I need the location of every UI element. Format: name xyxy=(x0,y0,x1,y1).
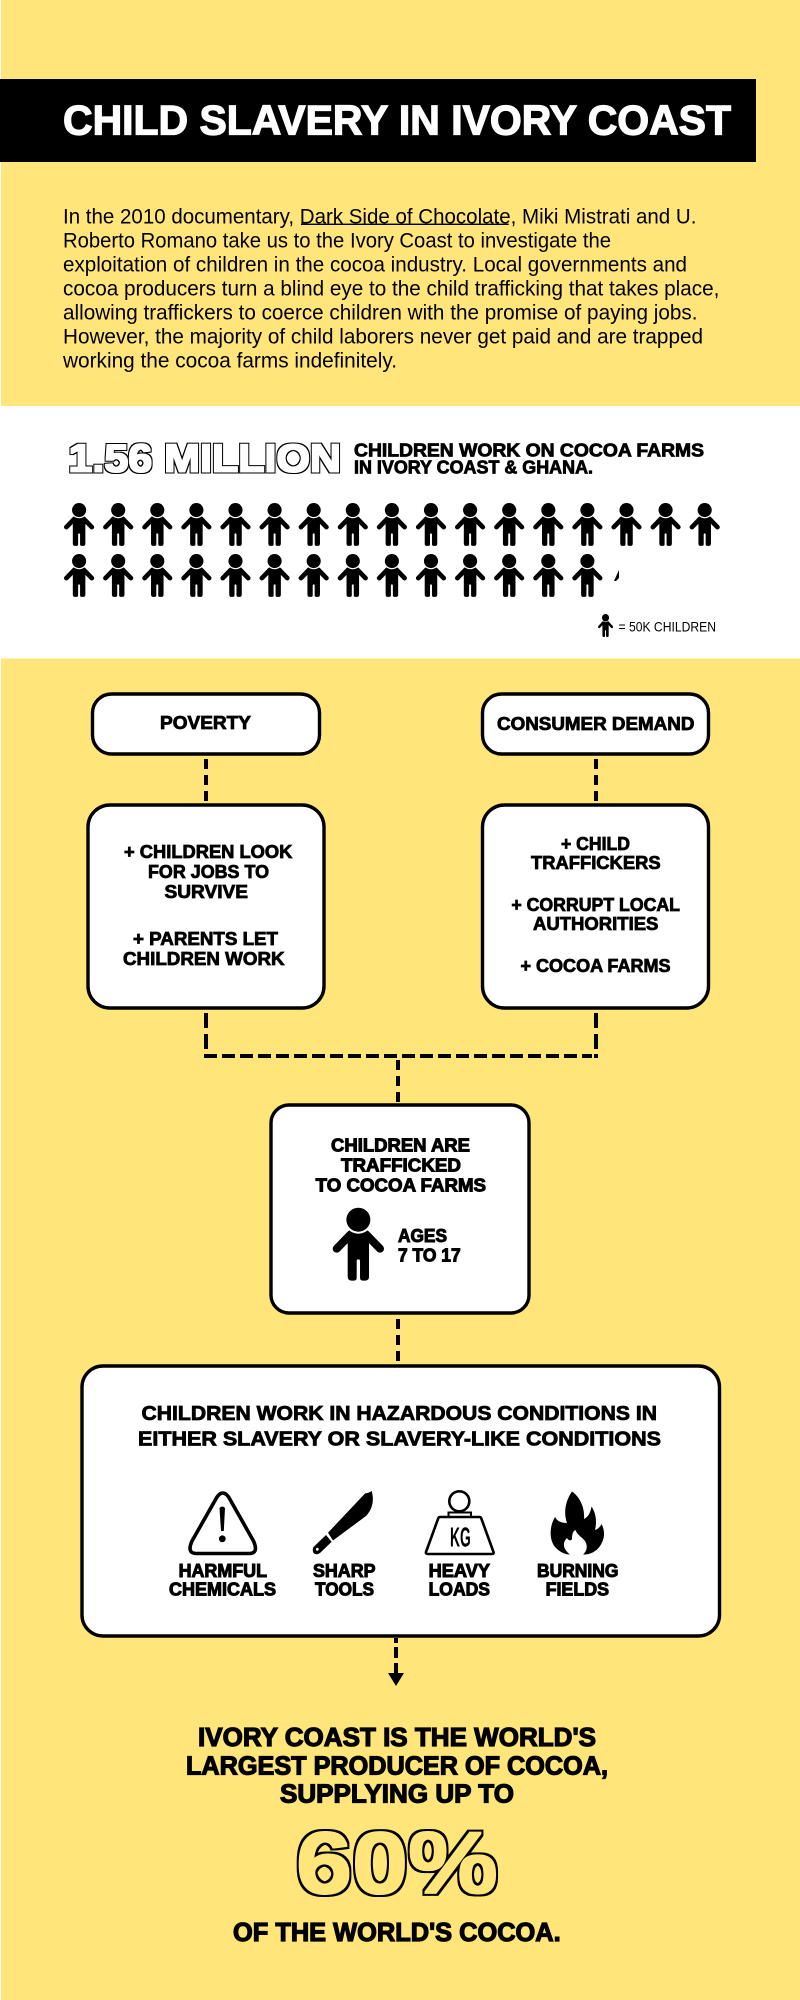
box: demand effects: + CORRUPT LOCAL xyxy=(511,894,680,915)
icon: warning triangle xyxy=(190,1493,255,1554)
intro paragraph: working the cocoa farms indefinitely. xyxy=(62,349,397,372)
label: sharp tools: SHARP xyxy=(313,1561,376,1581)
label: harmful chemicals: HARMFUL xyxy=(179,1561,267,1581)
box: consumer demand xyxy=(482,694,708,754)
hazards heading: EITHER SLAVERY OR SLAVERY-LIKE CONDITIONS xyxy=(138,1429,661,1451)
closing statement: OF THE WORLD'S COCOA. xyxy=(233,1919,561,1947)
conclusion statement xyxy=(186,1724,608,1808)
ages label: AGES xyxy=(398,1226,447,1246)
title banner: CHILD SLAVERY IN IVORY COAST xyxy=(63,96,731,144)
box: poverty effects: SURVIVE xyxy=(164,881,248,902)
pictogram: children row two xyxy=(66,553,619,597)
label: burning fields: FIELDS xyxy=(546,1579,609,1599)
panel: hazardous conditions xyxy=(82,1366,720,1636)
conclusion statement: IVORY COAST IS THE WORLD'S xyxy=(198,1724,596,1752)
connector: trafficked to hazards xyxy=(396,1319,400,1364)
intro paragraph: allowing traffickers to coerce children with the promise of paying jobs. xyxy=(63,301,698,324)
connector: causes to details xyxy=(206,759,596,803)
icon: kg weight xyxy=(426,1491,494,1554)
legend xyxy=(599,613,716,637)
intro paragraph: However, the majority of child laborers never get paid and are trapped xyxy=(63,325,703,348)
box: poverty effects: CHILDREN WORK xyxy=(123,948,285,969)
icon: flame xyxy=(551,1492,604,1555)
label: heavy loads: HEAVY xyxy=(429,1561,490,1581)
big percentage: 60% xyxy=(296,1815,498,1912)
intro paragraph: cocoa producers turn a blind eye to the child trafficking that takes place, xyxy=(63,277,719,300)
statistic caption xyxy=(354,440,704,478)
conclusion statement: SUPPLYING UP TO xyxy=(280,1780,514,1808)
box: poverty effects: + PARENTS LET xyxy=(133,928,279,949)
box: demand effects: + CHILD xyxy=(561,833,630,854)
hazards heading: CHILDREN WORK IN HAZARDOUS CONDITIONS IN xyxy=(142,1403,657,1425)
label: sharp tools: TOOLS xyxy=(315,1579,374,1599)
label: sharp tools xyxy=(313,1561,376,1599)
label: harmful chemicals xyxy=(169,1561,276,1599)
box: demand effects: AUTHORITIES xyxy=(533,913,658,934)
big number: 1.56 MILLION xyxy=(68,438,341,480)
box: children are trafficked: TO COCOA FARMS xyxy=(316,1176,486,1196)
box: demand effects xyxy=(482,805,708,1008)
icon: kg weight: KG xyxy=(450,1522,471,1552)
statistic caption: CHILDREN WORK ON COCOA FARMS xyxy=(354,440,704,460)
intro paragraph: In the 2010 documentary, Dark Side of Chocolate, Miki Mistrati and U. xyxy=(63,205,696,228)
label: heavy loads xyxy=(429,1561,490,1599)
panel: statistic xyxy=(0,406,800,658)
ages label xyxy=(398,1226,461,1266)
box: children are trafficked xyxy=(271,1105,529,1313)
box: consumer demand: CONSUMER DEMAND xyxy=(497,714,694,734)
box: demand effects: TRAFFICKERS xyxy=(531,852,661,873)
label: heavy loads: LOADS xyxy=(429,1579,490,1599)
box: demand effects: + COCOA FARMS xyxy=(520,955,670,976)
box: poverty: POVERTY xyxy=(160,713,251,733)
legend: = 50K CHILDREN xyxy=(618,618,716,634)
intro paragraph xyxy=(62,205,719,372)
icon: machete xyxy=(313,1491,373,1554)
intro paragraph: exploitation of children in the cocoa industry. Local governments and xyxy=(63,253,687,276)
box: poverty effects xyxy=(88,805,324,1008)
box: poverty xyxy=(92,694,320,754)
box: poverty effects: FOR JOBS TO xyxy=(148,861,269,882)
ages label: 7 TO 17 xyxy=(398,1246,461,1266)
box: poverty effects: + CHILDREN LOOK xyxy=(124,841,293,862)
label: burning fields xyxy=(537,1561,618,1599)
arrow: down to conclusion xyxy=(388,1638,404,1686)
connector: merging dashed line xyxy=(204,1013,598,1104)
label: harmful chemicals: CHEMICALS xyxy=(169,1579,276,1599)
conclusion statement: LARGEST PRODUCER OF COCOA, xyxy=(186,1752,608,1780)
box: children are trafficked: TRAFFICKED xyxy=(341,1156,461,1176)
hazards heading xyxy=(138,1403,661,1451)
label: burning fields: BURNING xyxy=(537,1561,618,1581)
icon: child xyxy=(337,1206,380,1281)
statistic caption: IN IVORY COAST & GHANA. xyxy=(354,458,593,478)
pictogram: children row one xyxy=(66,502,717,546)
intro paragraph: Roberto Romano take us to the Ivory Coast to investigate the xyxy=(63,229,611,252)
box: children are trafficked: CHILDREN ARE xyxy=(331,1136,470,1156)
title banner xyxy=(0,79,756,162)
